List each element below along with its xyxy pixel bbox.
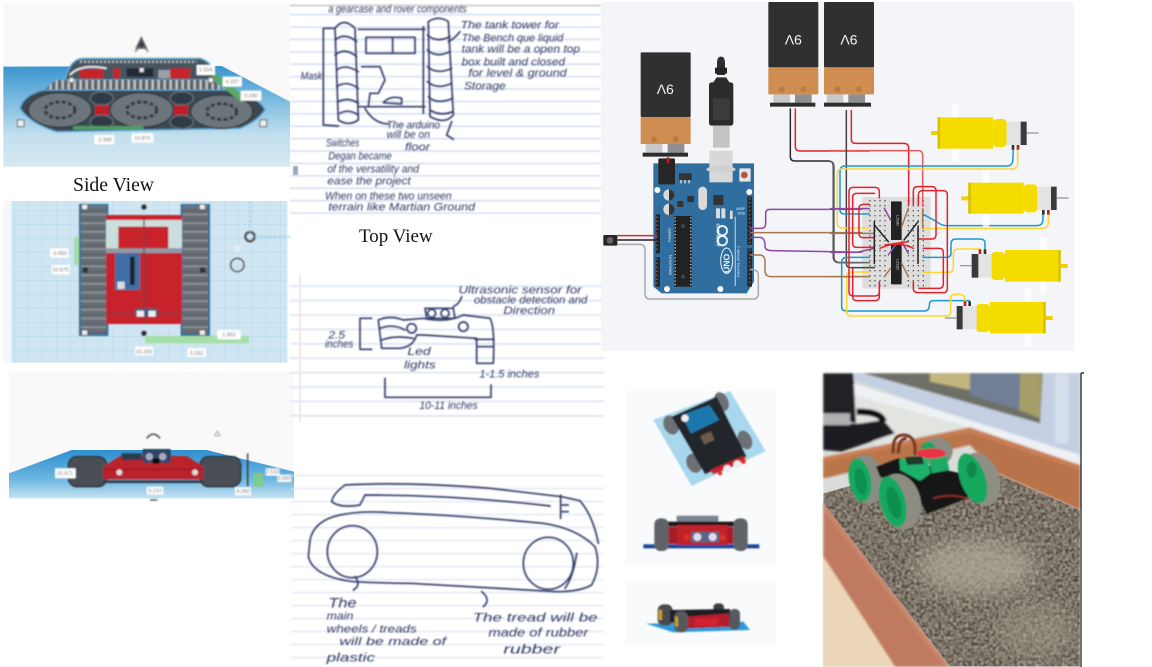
ultrasonic sensor [143,449,171,464]
battery middle: 9V [784,32,802,48]
sketch notes [301,4,580,214]
rover chassis [876,458,974,514]
drag handles [17,68,267,127]
dimension labels [94,65,261,144]
battery and motor wiring [830,110,1048,316]
tank upper deck details [70,62,197,78]
sketch notes: floor [405,142,432,154]
sketch notes: 2.5 [327,329,346,341]
breadboard [862,197,931,289]
sketch notes: Ultrasonic sensor for [458,284,583,296]
panel: top view hand sketch [290,4,601,218]
road wheels large [28,93,253,128]
sketch notes: Direction [503,305,555,317]
logo and labels: ANALOG IN [669,255,673,275]
battery middle [768,2,818,107]
logo and labels: DIGITAL (PWM~) [735,246,740,277]
gravel bed [823,472,1080,667]
USB cable [709,57,733,148]
battery left: 9V [656,81,674,97]
rover left wheel [845,452,888,507]
planter box front wall [823,502,950,667]
sketch notes: The arduino [387,119,440,131]
breadboard: L293D [895,259,899,270]
front dimension labels: 10.971 [57,471,73,477]
right track [182,205,209,335]
battery right [824,2,874,107]
dimension labels: 4.257 [226,79,239,85]
sketch notes: Storage [464,80,506,92]
rover wires [893,435,915,455]
sketch notes: Led [407,346,432,358]
light gravel patch [917,538,1077,657]
panel: top view 3D model [3,201,290,363]
sketch: side profile with wheels [308,484,598,607]
sketch notes: plastic [325,651,375,665]
tank upper track [65,58,217,80]
sketch notes: The tread will be [473,611,598,625]
dimension labels: -2.990 [97,138,112,144]
sketch notes: 10-11 inches [419,400,478,412]
sketch notes: The Bench que liquid [462,33,564,45]
sketch notes: a gearcase and rover components [328,4,467,16]
arduino board [653,151,754,293]
logo and labels: POWER [668,228,672,242]
right half of circuit [824,2,1069,347]
panel: side view 3D model [3,3,290,167]
sketch notes: Degan became [328,150,392,162]
left half of circuit [603,2,870,299]
dimension labels: 10.875 [134,136,151,142]
sketch notes [325,284,588,412]
motor 3 [960,237,1068,295]
sketch notes: terrain like Martian Ground [328,202,476,214]
red body [106,215,182,324]
panel: small 3D renders [626,390,776,645]
motor 1 [931,104,1039,162]
front dimension labels: 0.210 [148,488,162,494]
sketch notes: of the versatility and [327,164,420,176]
dimension labels: 1.504 [199,68,212,74]
logo and labels: AREF [736,207,745,211]
sketch notes: 1-1.5 inches [479,368,540,380]
rover rear wheel [921,438,953,466]
tank lower track [20,90,265,132]
panel: side hand sketch [291,465,604,665]
sketch notes: The tank tower for [461,19,560,31]
front dimension labels: 2.510 [266,470,279,476]
panel: photo of rover in gravel [823,373,1080,667]
left track [80,205,107,335]
sketch: front of rover [360,297,494,397]
label: Side View: Side View [73,174,155,196]
logo and labels: ARDUINO [715,223,721,247]
sketch notes: wheels / treads [327,623,417,635]
ultrasonic sensor [135,308,158,317]
handles and dimension labels: 1.952 [222,333,236,339]
rover red lid and green boxes [899,448,949,481]
front dimension labels [55,468,291,495]
panel: front view 3D model [9,372,294,500]
sketch notes: Switches [326,138,360,150]
front dimension labels: 3.892 [278,476,291,482]
sketch notes: When on these two unseen [325,190,452,202]
label: Top View: Top View [359,226,433,247]
breadboard: L293D [895,215,899,226]
handles and dimension labels: -3.993 [51,251,67,257]
planter box back walls [823,427,1080,510]
sketch notes [325,594,598,665]
handles and dimension labels [50,204,241,357]
sketch notes: box built and closed [462,57,566,69]
road wheels small [90,92,193,129]
render: angled rover [646,603,750,632]
handles and dimension labels: 0.252 [190,351,203,357]
red hull [103,453,203,482]
sketch notes: inches [325,338,354,350]
render: front of rover [643,516,759,551]
red hull sections [95,105,188,115]
motor 2 [961,170,1069,227]
handles and dimension labels: 10.875 [53,268,69,274]
rover front wheel [873,469,927,534]
sketch notes: lights [404,359,436,371]
sketch notes: The [328,594,357,610]
sketch notes: for level & ground [468,68,568,80]
breadboard red loops [849,187,947,301]
battery left [641,52,691,157]
sketch notes: Mask [301,70,323,82]
battery middle wires [790,108,870,263]
panel: front hand sketch [290,275,604,422]
motor 4 [945,288,1053,347]
sketch notes: will be made of [339,636,447,648]
sketch notes: rubber [503,642,561,656]
arduino board [115,253,140,290]
sketch notes: tank will be a open top [462,44,580,56]
rover right wheel [952,447,1008,511]
photo edge line [1081,373,1084,667]
dimension labels: 0.240 [244,93,258,99]
breadboard jumpers [874,208,923,277]
sketch notes: obstacle detection and [474,294,588,306]
tank tread strip [43,80,224,91]
handles and dimension labels: 10.205 [136,349,152,355]
sketch notes: main [327,610,353,622]
logo and labels: GND [738,212,746,216]
rotation gizmos [231,202,290,272]
front dimension labels: 4.260 [236,489,250,495]
sketch notes: made of rubber [488,626,590,640]
right track [200,457,241,487]
render: top-down rover [653,390,766,486]
sketch: tracks and chassis [323,18,460,139]
window and sill [853,373,1080,465]
desk equipment [823,373,895,452]
logo and labels: UNO [722,253,732,273]
left track [68,457,107,487]
battery right: 9V [840,32,858,48]
distance sensor [603,235,617,246]
sketch notes: will be on [387,129,430,141]
icon: view gizmo [135,37,148,52]
left wires [617,209,870,299]
sketch notes: ease the project [327,175,412,187]
logo and labels [668,207,746,277]
panel: circuit diagram [601,2,1074,351]
